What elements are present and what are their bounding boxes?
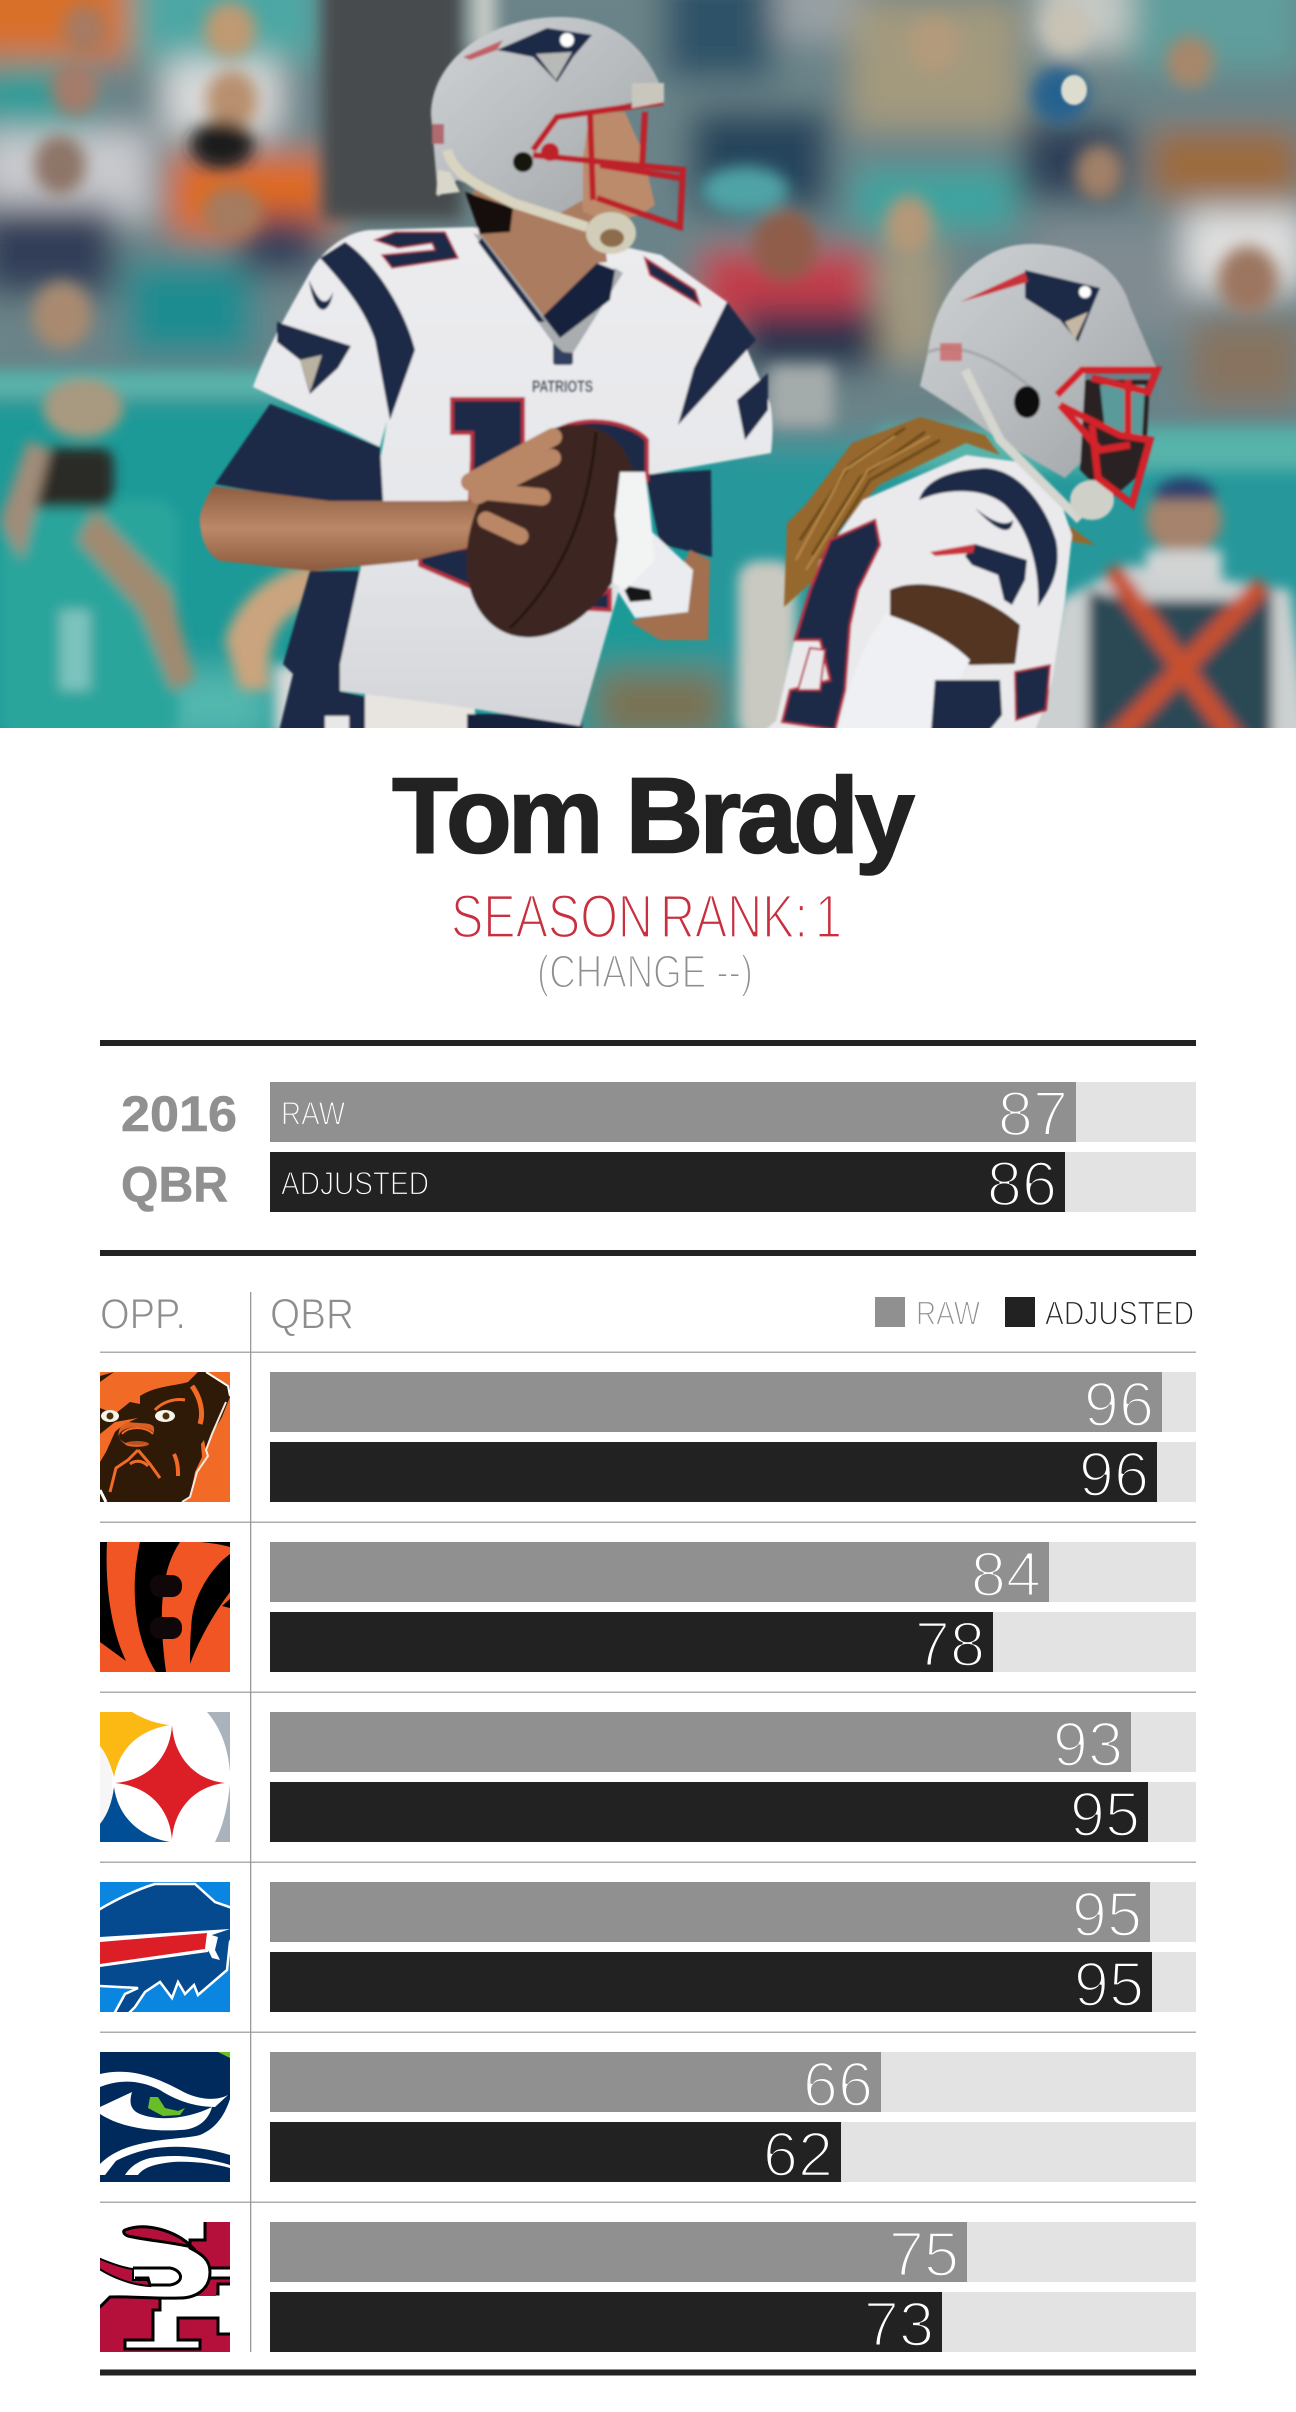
row: vs Bengals: [100, 1540, 1196, 1680]
face: [575, 112, 655, 222]
row: vs 49ers: [96, 2218, 1196, 2360]
player: number 28 teammate: [766, 242, 1164, 728]
top rule: [100, 1040, 1196, 1046]
chin strap and neck: [965, 370, 1080, 520]
bar: raw 96: [270, 1370, 1196, 1440]
jersey body: [253, 227, 773, 726]
label: 2016 QBR: 2016: [121, 1086, 237, 1142]
label: 2016 QBR: [121, 1086, 237, 1212]
left undershirt sleeve: [215, 404, 383, 505]
title: player name: Tom Brady: [392, 754, 915, 876]
icon: Seahawks logo: [100, 2052, 230, 2182]
bar: raw 96: 96: [1084, 1370, 1154, 1440]
bar: raw 87: RAW: [281, 1096, 346, 1132]
bar: raw 84: [270, 1540, 1196, 1610]
bar: raw 75: 75: [889, 2220, 959, 2290]
right undershirt sleeve and forearm: [645, 470, 712, 557]
icon: Bengals tiger stripe logo: [100, 1542, 230, 1672]
bar: raw 93: 93: [1053, 1710, 1123, 1780]
row: vs Browns: [100, 1370, 1196, 1510]
legend: [875, 1294, 1194, 1332]
bar: raw 66: 66: [803, 2050, 873, 2120]
row: vs Bills: [95, 1880, 1196, 2020]
bar: raw 84: 84: [971, 1540, 1041, 1610]
bar: raw 87: [270, 1080, 1196, 1150]
bar: adjusted 96: 96: [1079, 1440, 1149, 1510]
football: [433, 396, 671, 666]
red facemask: [533, 102, 683, 227]
bar: adjusted 95: 95: [1070, 1780, 1140, 1850]
heading: opponent column: OPP.: [100, 1290, 186, 1338]
lower number: [930, 678, 1004, 728]
glove: [612, 472, 655, 590]
chin strap: [447, 150, 587, 227]
bar: raw 95: 95: [1072, 1880, 1142, 1950]
forearm: [200, 486, 490, 571]
photo background: blurred crowd and teal wall: [0, 0, 1296, 790]
row: vs Seahawks: [100, 2050, 1196, 2190]
icon: Browns bulldog logo: [100, 1372, 230, 1502]
jersey number 28: [782, 520, 880, 730]
wrist tape: [617, 530, 693, 618]
hair: [465, 192, 513, 234]
icon: Steelers hypocycloid logo: [100, 1712, 230, 1842]
subtitle: rank change: (CHANGE --): [537, 946, 753, 998]
shoulder stripe: [919, 468, 1058, 607]
bright stadium dot: [1061, 75, 1087, 105]
player: Tom Brady: [200, 17, 773, 735]
bar: adjusted 62: [270, 2120, 1196, 2190]
white pants and belt: [365, 694, 475, 734]
bar: adjusted 95: 95: [1074, 1950, 1144, 2020]
bar: raw 95: [270, 1880, 1196, 1950]
bar: adjusted 86: ADJUSTED: [281, 1166, 429, 1202]
neck: [473, 190, 607, 320]
dreadlocks: [784, 417, 1000, 607]
NFL pants shield: [325, 716, 349, 730]
icon: 49ers SF logo: [100, 2222, 230, 2352]
helmet: [920, 244, 1156, 478]
bottom rule: [100, 2370, 1196, 2376]
left sleeve logo: [277, 322, 351, 394]
fingers: [470, 437, 553, 536]
red facemask: [1057, 370, 1157, 504]
legend: RAW: [916, 1294, 981, 1332]
jersey number 12: [452, 399, 523, 500]
bar: adjusted 95: [270, 1950, 1196, 2020]
bar: adjusted 96: [270, 1440, 1196, 1510]
bar: adjusted 95: [270, 1780, 1196, 1850]
S letterform: [96, 2218, 210, 2307]
white compression sleeve: [888, 614, 972, 665]
row: vs Steelers: [100, 1710, 1196, 1850]
jersey: [753, 455, 1072, 740]
helmet: [431, 17, 664, 217]
PATRIOTS chest wordmark: PATRIOTS: [532, 377, 593, 396]
collar: [473, 233, 560, 343]
sleeve swoosh: [309, 280, 333, 310]
F crossbar and serif: [125, 2284, 234, 2349]
cameraman at left: [0, 378, 325, 740]
subtitle: season rank: SEASON RANK: 1: [451, 882, 842, 950]
bar: adjusted 73: 73: [864, 2290, 934, 2360]
bar: adjusted 78: [270, 1610, 1196, 1680]
helmet logo: [497, 28, 592, 82]
bar: raw 75: [270, 2220, 1196, 2290]
hero photo: Tom Brady dropping back to pass: [0, 0, 1296, 796]
label: 2016 QBR: QBR: [121, 1156, 228, 1212]
bar: adjusted 86: [270, 1150, 1196, 1220]
NFL collar shield: [553, 341, 573, 365]
heading: QBR column: QBR: [270, 1290, 354, 1338]
bar: adjusted 86: 86: [987, 1150, 1057, 1220]
shoulder number: [375, 232, 458, 268]
icon: Bills charging buffalo logo: [100, 1882, 230, 2012]
shoulder stripes: [320, 242, 415, 420]
pants side stripe: [278, 571, 365, 735]
referee in X vest at right: [738, 478, 1296, 763]
legend: ADJUSTED: [1045, 1294, 1194, 1332]
right sleeve logo: [737, 373, 768, 440]
helmet logo: [1025, 270, 1100, 342]
middle rule: [100, 1250, 1196, 1256]
skin arm: [890, 584, 1020, 665]
panel: 2016 season QBR: [121, 1080, 1196, 1220]
bar: adjusted 78: 78: [915, 1610, 985, 1680]
sleeve swoosh: [975, 508, 1013, 530]
sleeve team logo: [965, 544, 1027, 605]
table header: [100, 1290, 1194, 1338]
bar: raw 87: 87: [998, 1080, 1068, 1150]
bar: raw 93: [270, 1710, 1196, 1780]
bar: adjusted 62: 62: [763, 2120, 833, 2190]
bar: adjusted 73: [270, 2290, 1196, 2360]
bar: raw 66: [270, 2050, 1196, 2120]
